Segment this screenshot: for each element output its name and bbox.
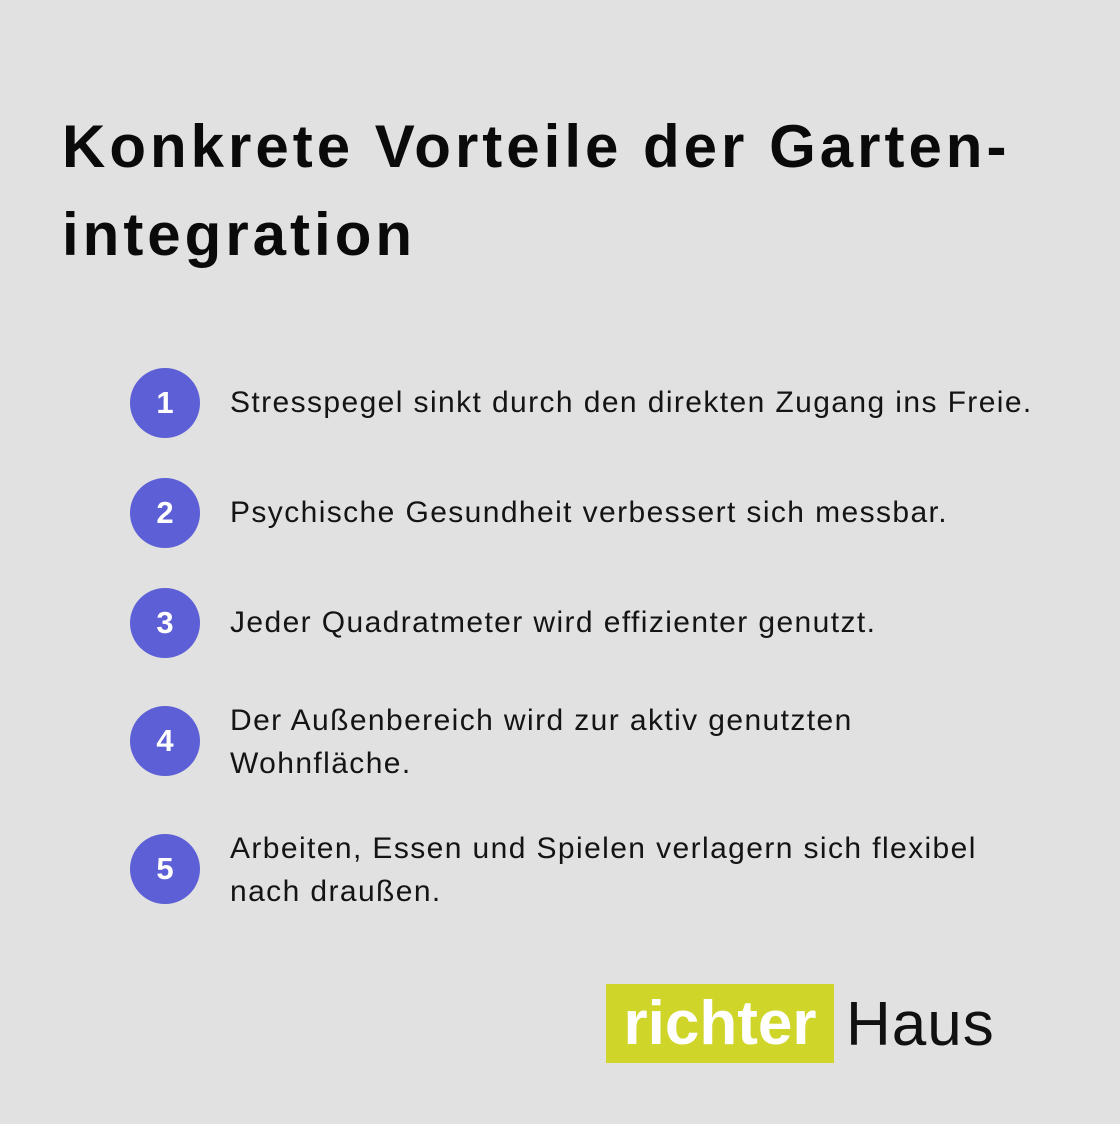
title: Konkrete Vorteile der Garten- — [62, 113, 1010, 180]
number 4 — [130, 706, 200, 776]
logo box: richter: richter — [624, 989, 816, 1058]
text 5: Arbeiten, Essen und Spielen verlagern sich flexibel — [230, 832, 977, 865]
text 3: Jeder Quadratmeter wird effizienter genutzt. — [230, 606, 876, 639]
number 2: 2 — [156, 495, 174, 530]
item 2 — [130, 478, 948, 548]
number 3 — [130, 588, 200, 658]
number 1 — [130, 368, 200, 438]
item 1 — [130, 368, 1033, 438]
text 5 — [230, 832, 977, 908]
item 5 — [130, 832, 977, 908]
item 4 — [130, 704, 853, 780]
number 4: 4 — [156, 723, 174, 758]
text 4 — [230, 704, 853, 780]
number 5 — [130, 834, 200, 904]
title: integration — [62, 201, 416, 268]
number 2 — [130, 478, 200, 548]
title — [62, 113, 1010, 268]
logo text: Haus: Haus — [846, 990, 995, 1059]
text 1: Stresspegel sinkt durch den direkten Zugang ins Freie. — [230, 386, 1033, 419]
number 3: 3 — [156, 605, 174, 640]
number 1: 1 — [156, 385, 174, 420]
text 4: Wohnfläche. — [230, 747, 412, 780]
item 3 — [130, 588, 876, 658]
text 2: Psychische Gesundheit verbessert sich messbar. — [230, 496, 948, 529]
text 4: Der Außenbereich wird zur aktiv genutzten — [230, 704, 853, 737]
logo — [606, 984, 995, 1063]
number 5: 5 — [156, 851, 174, 886]
text 5: nach draußen. — [230, 875, 442, 908]
